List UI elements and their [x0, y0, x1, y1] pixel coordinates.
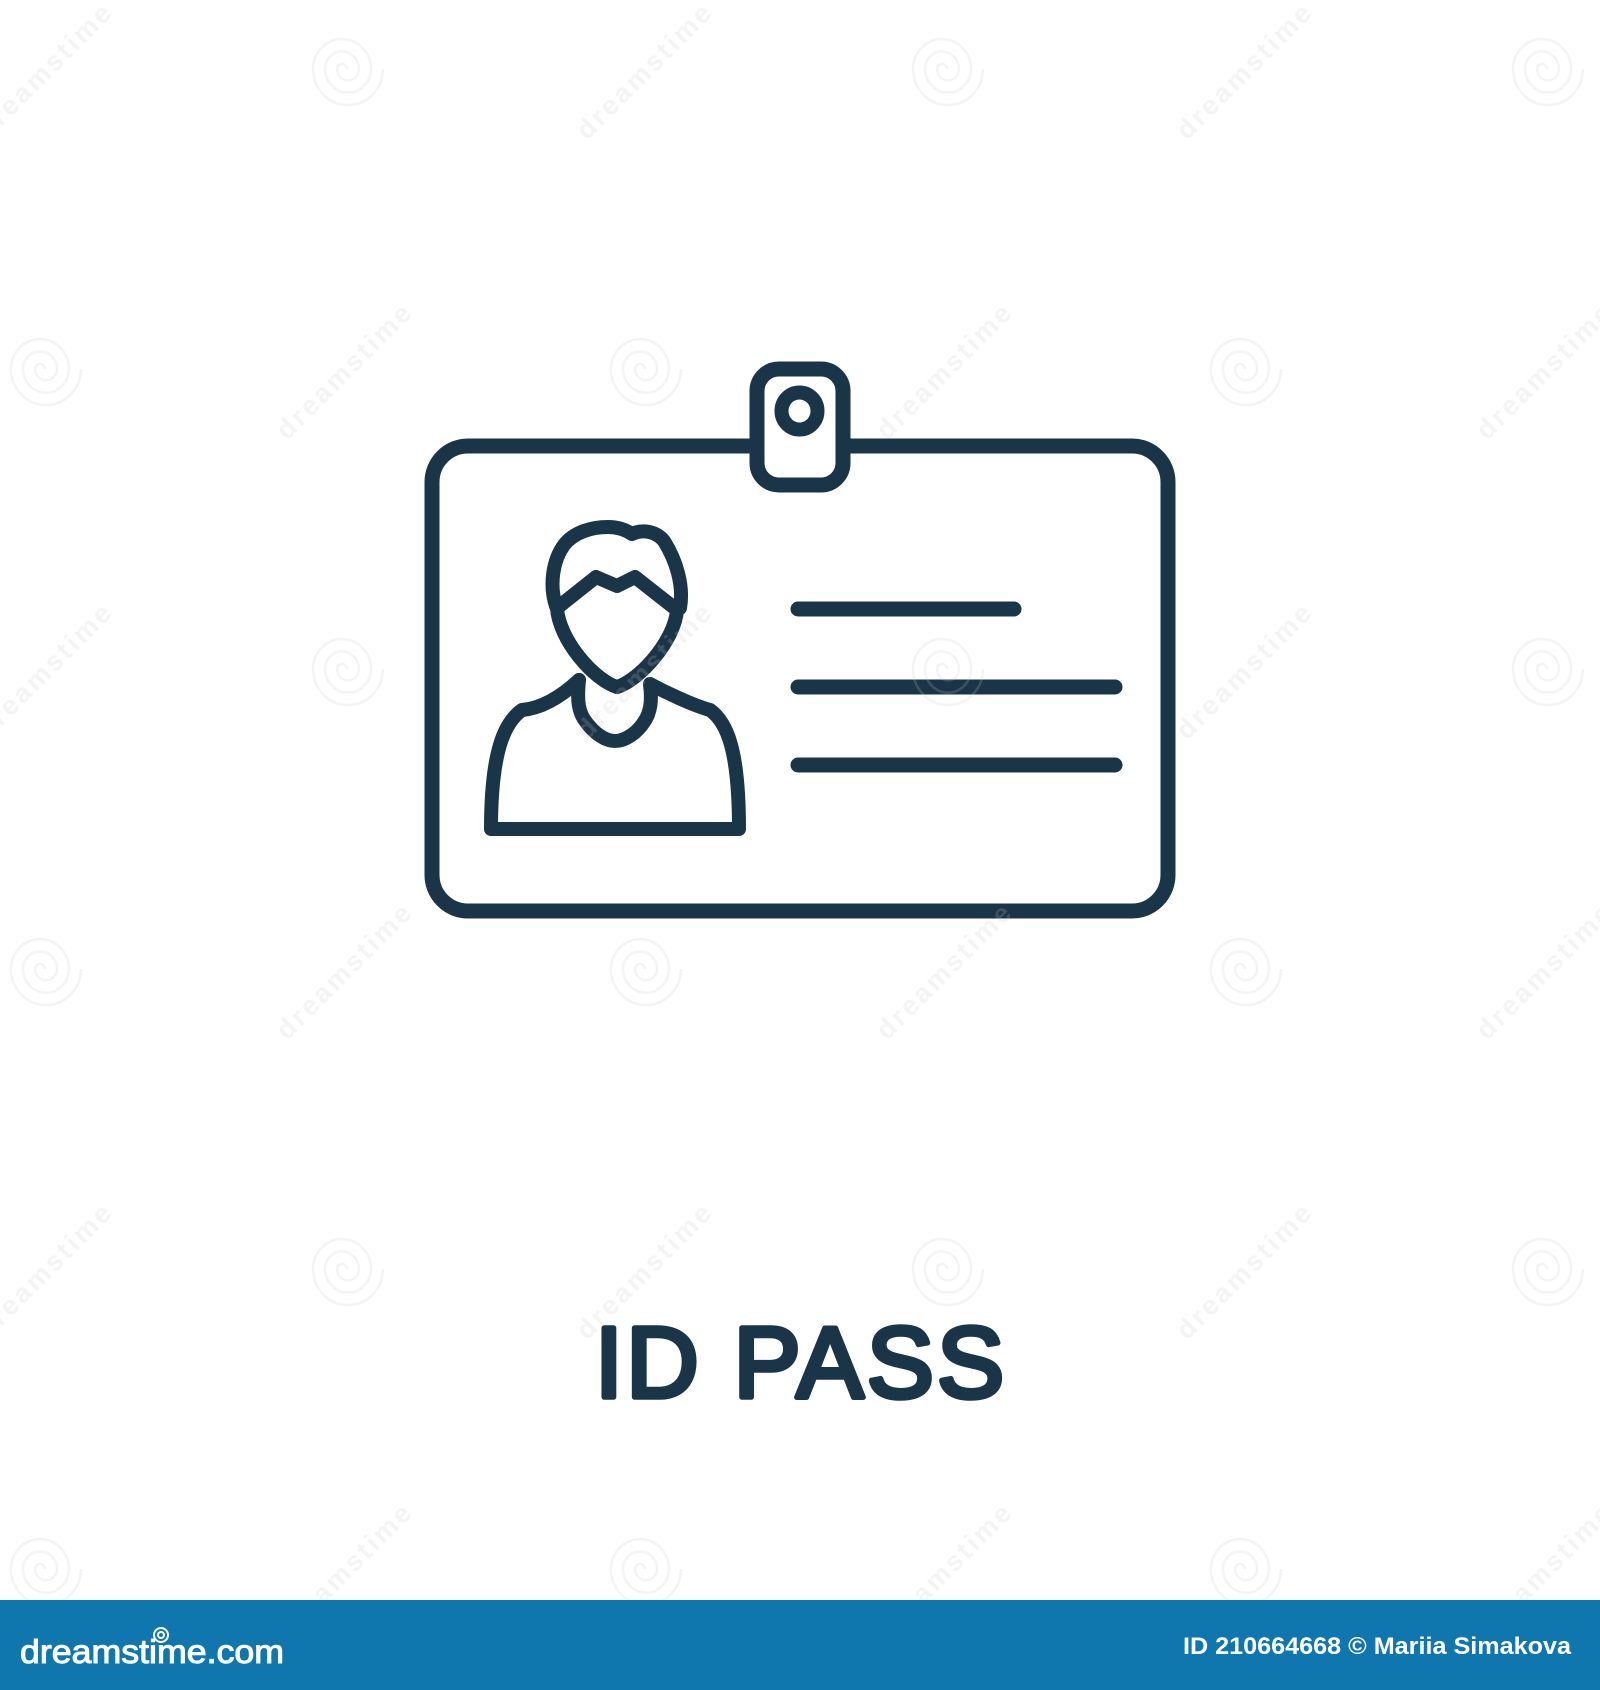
badge card outline: [432, 446, 1168, 911]
footer banner: [0, 1600, 1600, 1690]
watermark pattern: dreamstime: [1170, 598, 1317, 745]
hair: [553, 527, 681, 608]
watermark pattern: dreamstime: [270, 298, 417, 445]
badge clip: [757, 369, 843, 485]
person portrait: [491, 527, 739, 829]
icon: ID badge: [432, 369, 1168, 911]
watermark pattern: dreamstime: [570, 1198, 717, 1345]
watermark pattern: dreamstime: [270, 1498, 417, 1645]
logo spiral: [154, 1628, 168, 1642]
watermark pattern: dreamstime: [1170, 1198, 1317, 1345]
image credit: ID 210664668 © Mariia Simakova: [1183, 1633, 1572, 1660]
title: ID PASS: [595, 1307, 1004, 1419]
text line 1: [798, 602, 1014, 616]
text line 2: [798, 680, 1115, 694]
face and fringe: [557, 577, 677, 687]
watermark pattern: dreamstime: [870, 1498, 1017, 1645]
logo wordmark: dreamstime.com: [20, 1633, 284, 1670]
watermark pattern: dreamstime: [570, 0, 717, 145]
watermark pattern: dreamstime: [270, 898, 417, 1045]
text line 3: [798, 758, 1115, 772]
watermark pattern: dreamstime: [1170, 0, 1317, 145]
watermark pattern: dreamstime: [570, 598, 717, 745]
shoulders and torso: [491, 680, 739, 829]
collar: [578, 680, 651, 741]
watermark pattern: dreamstime: [870, 298, 1017, 445]
watermark pattern: dreamstime: [870, 898, 1017, 1045]
